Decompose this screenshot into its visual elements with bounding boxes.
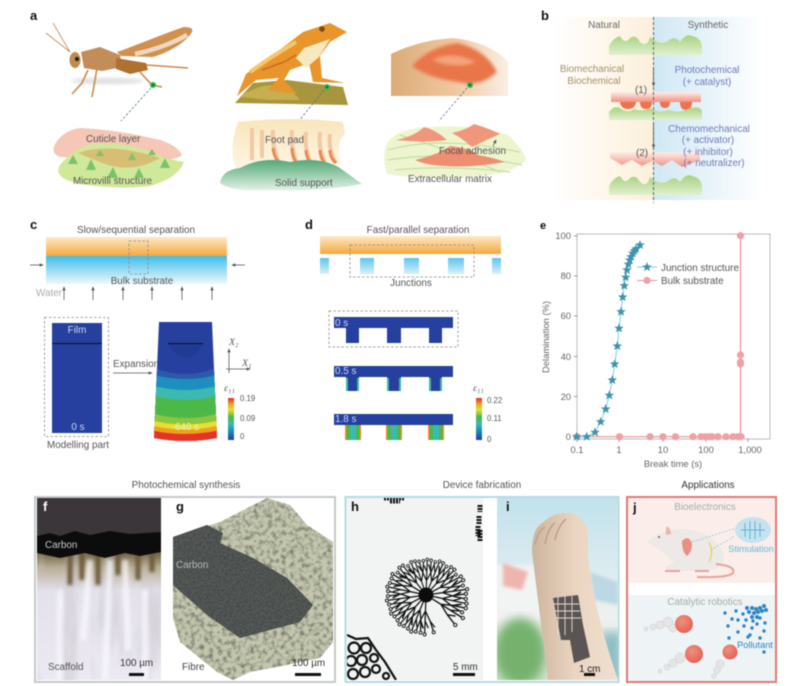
label a: a <box>30 8 38 23</box>
y tick labels: 20 <box>561 391 571 402</box>
neutralizer label: (+ neutralizer) <box>683 158 745 169</box>
chemomechanical label: Chemomechanical <box>668 124 750 135</box>
panel f: scaffold micrograph: f <box>43 499 48 514</box>
coordinate axes: X₁ <box>241 358 251 369</box>
substrate label: Bulk substrate <box>111 276 174 287</box>
heading synthetic: Synthetic <box>688 20 728 31</box>
panel f: scaffold micrograph: Scaffold <box>48 662 84 673</box>
bioelectronics background <box>628 498 775 583</box>
rat illustration <box>647 527 733 577</box>
colour scale <box>473 383 502 444</box>
image: insect <box>46 23 192 97</box>
pollutant label: Pollutant <box>737 640 773 650</box>
x tick labels: 1,000 <box>738 444 762 455</box>
panel b: natural vs synthetic separation <box>541 8 763 203</box>
FE block at 0 s: 0 s <box>71 422 85 433</box>
FE block at 0 s: Film <box>68 325 86 336</box>
panel h: fractal electrode: h <box>351 499 359 514</box>
film band <box>46 237 227 256</box>
arrow 2 <box>652 125 654 148</box>
junction structure series <box>572 240 645 441</box>
panel g: carbon on fibre: Carbon <box>176 560 208 571</box>
x tick labels: 0.1 <box>570 444 584 455</box>
panel g: carbon on fibre: Fibre <box>182 662 205 673</box>
FE at 1.8 s <box>334 414 453 440</box>
x tick labels: 100 <box>698 444 714 455</box>
dashed modelling box <box>329 311 458 347</box>
step 2: (2) <box>636 148 648 159</box>
activator label: (+ activator) <box>682 135 734 146</box>
label j: j <box>632 500 637 515</box>
x tick labels <box>570 444 762 455</box>
step 1: (1) <box>635 85 647 96</box>
heading: Slow/sequential separation <box>77 225 195 236</box>
colour scale <box>224 383 255 441</box>
stimulation inset <box>692 517 771 550</box>
FE block at 640 s <box>153 321 218 442</box>
marker line: skin to matrix <box>439 82 473 121</box>
dashed divider <box>652 17 654 203</box>
image: skin wound <box>391 38 508 96</box>
arrow 1 <box>652 67 654 86</box>
panel f: scaffold micrograph: 100 µm <box>120 658 153 669</box>
expansion label: Expansion <box>113 359 159 370</box>
panel e: delamination chart <box>540 220 770 469</box>
background: synthetic side <box>653 17 763 200</box>
panel f/g frame <box>35 497 335 682</box>
illustration: foot pad on solid support <box>220 119 362 190</box>
panel i: wearable on arm: 1 cm <box>579 664 600 675</box>
FE at 1.8 s: 1.8 s <box>335 414 356 425</box>
x tick labels: 10 <box>658 444 668 455</box>
illustration: cuticle and microvilli: Cuticle layer <box>86 134 141 145</box>
panel g: carbon on fibre <box>165 495 335 685</box>
colour scale: 0.09 <box>240 414 255 423</box>
FE at 0.5 s <box>334 366 453 391</box>
green surface top <box>609 35 702 55</box>
modelling dashed box <box>44 318 108 436</box>
catalytic heading: Catalytic robotics <box>667 597 743 608</box>
x tick labels: 1 <box>616 444 622 455</box>
y tick labels: 100 <box>555 230 571 241</box>
colour scale: ε₁₁ <box>473 383 484 394</box>
colour scale: 0 <box>487 435 492 444</box>
section heading: photochemical synthesis: Photochemical synthesis <box>132 480 240 491</box>
FE at 0 s: 0 s <box>335 318 348 329</box>
section heading: device fabrication: Device fabrication <box>443 480 521 491</box>
colour scale: 0.22 <box>487 396 502 405</box>
marker line: insect to cuticle <box>121 82 156 121</box>
bioelectronics heading: Bioelectronics <box>674 502 736 513</box>
colour scale: 0.19 <box>240 394 255 403</box>
junction blocks <box>320 258 501 274</box>
right fragment <box>478 505 480 542</box>
natural labels 2: Biochemical <box>567 76 621 87</box>
panel h: fractal electrode <box>346 498 483 680</box>
FE block at 0 s <box>52 323 102 433</box>
natural labels: Biomechanical <box>560 64 624 75</box>
panel g: carbon on fibre: g <box>176 499 184 514</box>
pollutant particles <box>723 604 768 654</box>
inhibitor label: (+ inhibitor) <box>683 147 733 158</box>
image: gecko on rock <box>235 23 348 105</box>
water arrows <box>64 287 212 300</box>
plot frame <box>574 234 770 442</box>
legend: Bulk substrate <box>661 276 724 287</box>
label b: b <box>541 8 549 23</box>
modelling label: Modelling part <box>47 440 109 451</box>
coordinate axes: X₂ <box>228 337 239 348</box>
expansion arrow <box>113 372 152 374</box>
section heading: applications: Applications <box>681 480 735 491</box>
dashed selection <box>350 245 474 277</box>
illustration: foot pad on solid support: Solid support <box>275 178 333 189</box>
panel c: slow separation <box>30 217 255 451</box>
illustration: focal adhesion and extracellular matrix: Focal adhesion <box>439 146 506 157</box>
y tick labels: 60 <box>561 310 571 321</box>
photochemical label: Photochemical <box>675 65 739 76</box>
frame <box>627 497 776 682</box>
y tick labels <box>555 230 571 442</box>
illustration: focal adhesion and extracellular matrix <box>384 124 526 185</box>
colour scale: 0 <box>240 432 245 441</box>
legend: Junction structure <box>661 263 739 274</box>
coordinate axes <box>226 337 251 373</box>
green surface bottom <box>609 175 702 195</box>
legend <box>637 262 739 287</box>
illustration: focal adhesion and extracellular matrix: Extracellular matrix <box>408 174 492 185</box>
label d: d <box>305 217 313 232</box>
colour scale: ε₁₁ <box>224 383 235 394</box>
catalytic background <box>628 595 775 681</box>
label c: c <box>30 217 37 232</box>
marker line: gecko to foot pad <box>298 84 330 122</box>
panel d: fast separation <box>305 217 502 444</box>
x axis title: Break time (s) <box>644 458 702 469</box>
panel f: scaffold micrograph: Carbon <box>45 540 77 551</box>
label e: e <box>540 220 546 232</box>
water label: Water <box>36 288 63 299</box>
panel i: wearable on arm <box>494 498 622 686</box>
catalyst label: (+ catalyst) <box>683 77 731 88</box>
separated film <box>610 152 700 167</box>
film band <box>320 236 501 254</box>
film attached with drips <box>609 92 702 120</box>
robot spheres and bubble trails <box>644 615 738 678</box>
y axis title: Delamination (%) <box>540 301 551 373</box>
bulk substrate series <box>573 232 745 440</box>
panel j: applications <box>627 497 776 682</box>
heading natural: Natural <box>588 20 620 31</box>
top fragment <box>384 499 404 502</box>
panel a: natural adhesion examples <box>30 8 526 190</box>
illustration: cuticle and microvilli: Microvilli structure <box>73 176 153 187</box>
y tick labels: 40 <box>561 351 571 362</box>
FE at 0 s <box>334 317 453 343</box>
colour scale: 0.11 <box>487 414 502 423</box>
illustration: foot pad on solid support: Foot pad <box>265 135 304 146</box>
y tick labels: 80 <box>561 270 571 281</box>
side arrows <box>30 264 245 266</box>
fractal pattern <box>384 556 470 637</box>
dashed selection <box>129 241 148 274</box>
FE at 0.5 s: 0.5 s <box>335 366 356 377</box>
panel i: wearable on arm: i <box>506 499 510 514</box>
mesh fragment <box>346 635 396 680</box>
bulk substrate band <box>46 256 227 284</box>
stimulation label: Stimulation <box>728 544 774 554</box>
background: natural side <box>553 17 653 200</box>
panel h: fractal electrode: 5 mm <box>453 662 478 673</box>
illustration: cuticle and microvilli <box>53 128 184 188</box>
FE block at 640 s: 640 s <box>175 422 199 433</box>
junctions label: Junctions <box>390 278 432 289</box>
panel f: scaffold micrograph <box>37 498 161 680</box>
panel g: carbon on fibre: 100 µm <box>292 658 325 669</box>
panel h/i frame <box>346 497 618 682</box>
heading: Fast/parallel separation <box>367 225 469 236</box>
y tick labels: 0 <box>566 431 571 442</box>
